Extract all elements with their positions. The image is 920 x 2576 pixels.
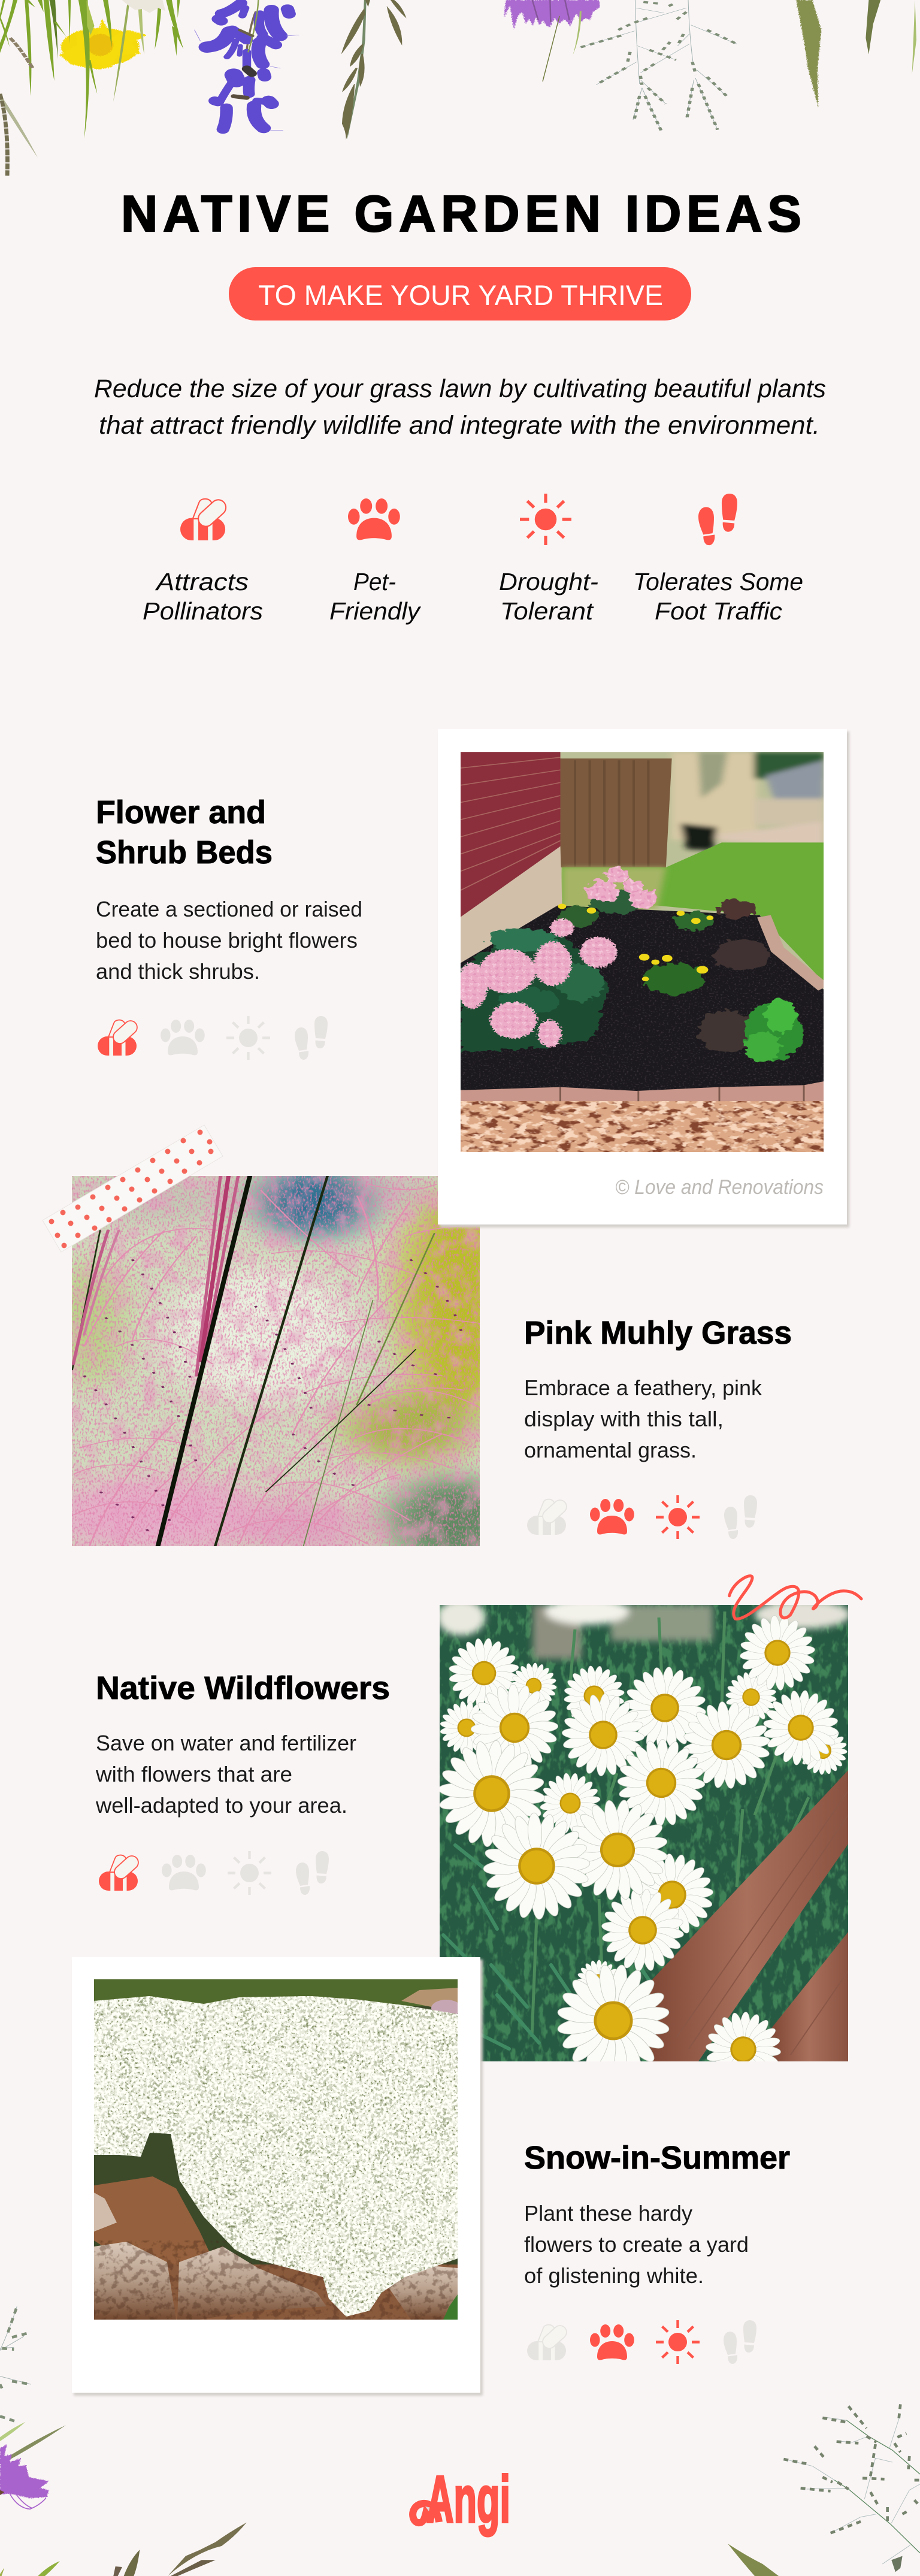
decoration: bottom left plants xyxy=(0,2306,247,2576)
mulch xyxy=(461,906,824,1092)
logo: Angi xyxy=(413,2463,510,2536)
stems xyxy=(473,1611,809,2037)
photo: snow-in-summer xyxy=(94,1979,461,2320)
brick wall xyxy=(461,752,561,917)
decoration: top purple salvia xyxy=(195,0,299,130)
decoration: top grass seed heads xyxy=(341,0,407,140)
thistle xyxy=(0,2444,49,2498)
feathery leaves xyxy=(443,1845,659,2049)
description: Plant these hardy xyxy=(524,2201,692,2226)
description: bed to house bright flowers xyxy=(96,928,358,953)
blurred top backdrop xyxy=(437,1598,851,1659)
card: snow-in-summer polaroid xyxy=(72,1957,483,2396)
description: with flowers that are xyxy=(95,1762,292,1786)
photo credit: © Love and Renovations xyxy=(615,1176,824,1199)
description: ornamental grass. xyxy=(524,1438,697,1462)
icons row xyxy=(98,1016,328,1060)
grass blades xyxy=(0,0,183,158)
spikelets xyxy=(783,2404,920,2533)
heading xyxy=(96,794,273,870)
photo: flower bed xyxy=(457,752,824,1152)
olive spike xyxy=(728,2544,779,2576)
heading: Native Wildflowers xyxy=(96,1670,390,1706)
dandelion xyxy=(59,19,147,69)
legend: tolerates some foot traffic: Foot Traffic xyxy=(655,597,783,625)
intro text xyxy=(94,374,826,440)
daisies xyxy=(434,1608,848,2090)
description: display with this tall, xyxy=(524,1407,724,1431)
description: Embrace a feathery, pink xyxy=(524,1375,762,1400)
far pink flowers xyxy=(586,867,658,914)
card: flower bed polaroid xyxy=(438,729,849,1227)
icons row xyxy=(99,1851,329,1895)
rocks xyxy=(94,2264,458,2320)
scribble xyxy=(730,1576,861,1619)
seed heads xyxy=(168,2523,247,2576)
legend: pet-friendly: Friendly xyxy=(329,597,422,625)
description xyxy=(95,1731,356,1818)
white daisy fragment xyxy=(122,0,165,13)
heading: Shrub Beds xyxy=(96,835,273,870)
blurred backdrop xyxy=(672,752,824,850)
section: snow-in-summer text xyxy=(524,2140,790,2364)
legend: tolerates some foot traffic: Tolerates Some xyxy=(633,568,803,595)
description: well-adapted to your area. xyxy=(95,1793,347,1818)
seed spikes xyxy=(10,38,32,68)
legend: drought-tolerant xyxy=(499,494,598,625)
heading: Pink Muhly Grass xyxy=(524,1315,792,1351)
section: native wildflowers text xyxy=(95,1670,390,1895)
icons row xyxy=(527,1495,757,1539)
description: and thick shrubs. xyxy=(96,959,260,984)
fence xyxy=(561,758,672,867)
legend: attracts pollinators: Pollinators xyxy=(143,597,263,625)
legend: tolerates some foot traffic xyxy=(633,494,803,625)
gravel xyxy=(461,1101,824,1152)
grass panicles xyxy=(0,2306,31,2384)
heading: Snow-in-Summer xyxy=(524,2140,790,2176)
hydrangea shrub xyxy=(461,929,610,1053)
intro text: that attract friendly wildlife and integrate with the environment. xyxy=(99,411,820,440)
legend: attracts pollinators: Attracts xyxy=(155,568,249,595)
description: Create a sectioned or raised xyxy=(96,897,362,921)
decoration: top airy grass panicles xyxy=(580,0,737,131)
icons row xyxy=(527,2320,756,2364)
ground and grass xyxy=(94,1979,458,2320)
logo: Angi: Angi xyxy=(426,2463,510,2536)
legend: drought-tolerant: Tolerant xyxy=(500,597,594,625)
soft background colours xyxy=(72,1176,480,1546)
section: flower and shrub beds text xyxy=(96,794,362,1060)
white flower mass xyxy=(94,1989,458,2320)
decoration: top left wildflowers and grass xyxy=(0,0,183,176)
feathery pink plumes xyxy=(74,1184,480,1546)
legend: pet-friendly: Pet- xyxy=(353,568,396,595)
blades xyxy=(0,2422,26,2441)
photo: daisies xyxy=(434,1598,851,2090)
legend: pet-friendly xyxy=(329,498,422,625)
intro text: Reduce the size of your grass lawn by cultivating beautiful plants xyxy=(94,374,826,403)
title: NATIVE GARDEN IDEAS xyxy=(121,186,801,243)
subtitle pill: TO MAKE YOUR YARD THRIVE xyxy=(258,279,663,311)
heading: Flower and xyxy=(96,794,266,830)
legend xyxy=(143,494,803,625)
description xyxy=(524,1375,762,1462)
decoration: top purple thistle xyxy=(504,0,600,81)
wooden beams xyxy=(646,1770,848,2061)
description xyxy=(524,2201,749,2288)
legend: attracts pollinators xyxy=(143,497,263,625)
subtitle pill xyxy=(229,267,691,321)
washi tape xyxy=(43,1125,223,1252)
photo: pink muhly grass xyxy=(72,1176,480,1546)
decoration: top olive spikes xyxy=(796,0,916,108)
decoration: bottom right plants xyxy=(728,2404,920,2576)
legend: drought-tolerant: Drought- xyxy=(499,568,598,595)
brick edging xyxy=(764,917,824,988)
description: Save on water and fertilizer xyxy=(96,1731,356,1755)
description xyxy=(96,897,362,984)
description: of glistening white. xyxy=(524,2263,704,2288)
stems xyxy=(72,1176,434,1546)
grass xyxy=(562,842,824,982)
stems xyxy=(834,2420,920,2553)
small plants xyxy=(558,899,803,1062)
section: pink muhly grass text xyxy=(524,1315,792,1539)
description: flowers to create a yard xyxy=(524,2232,749,2257)
